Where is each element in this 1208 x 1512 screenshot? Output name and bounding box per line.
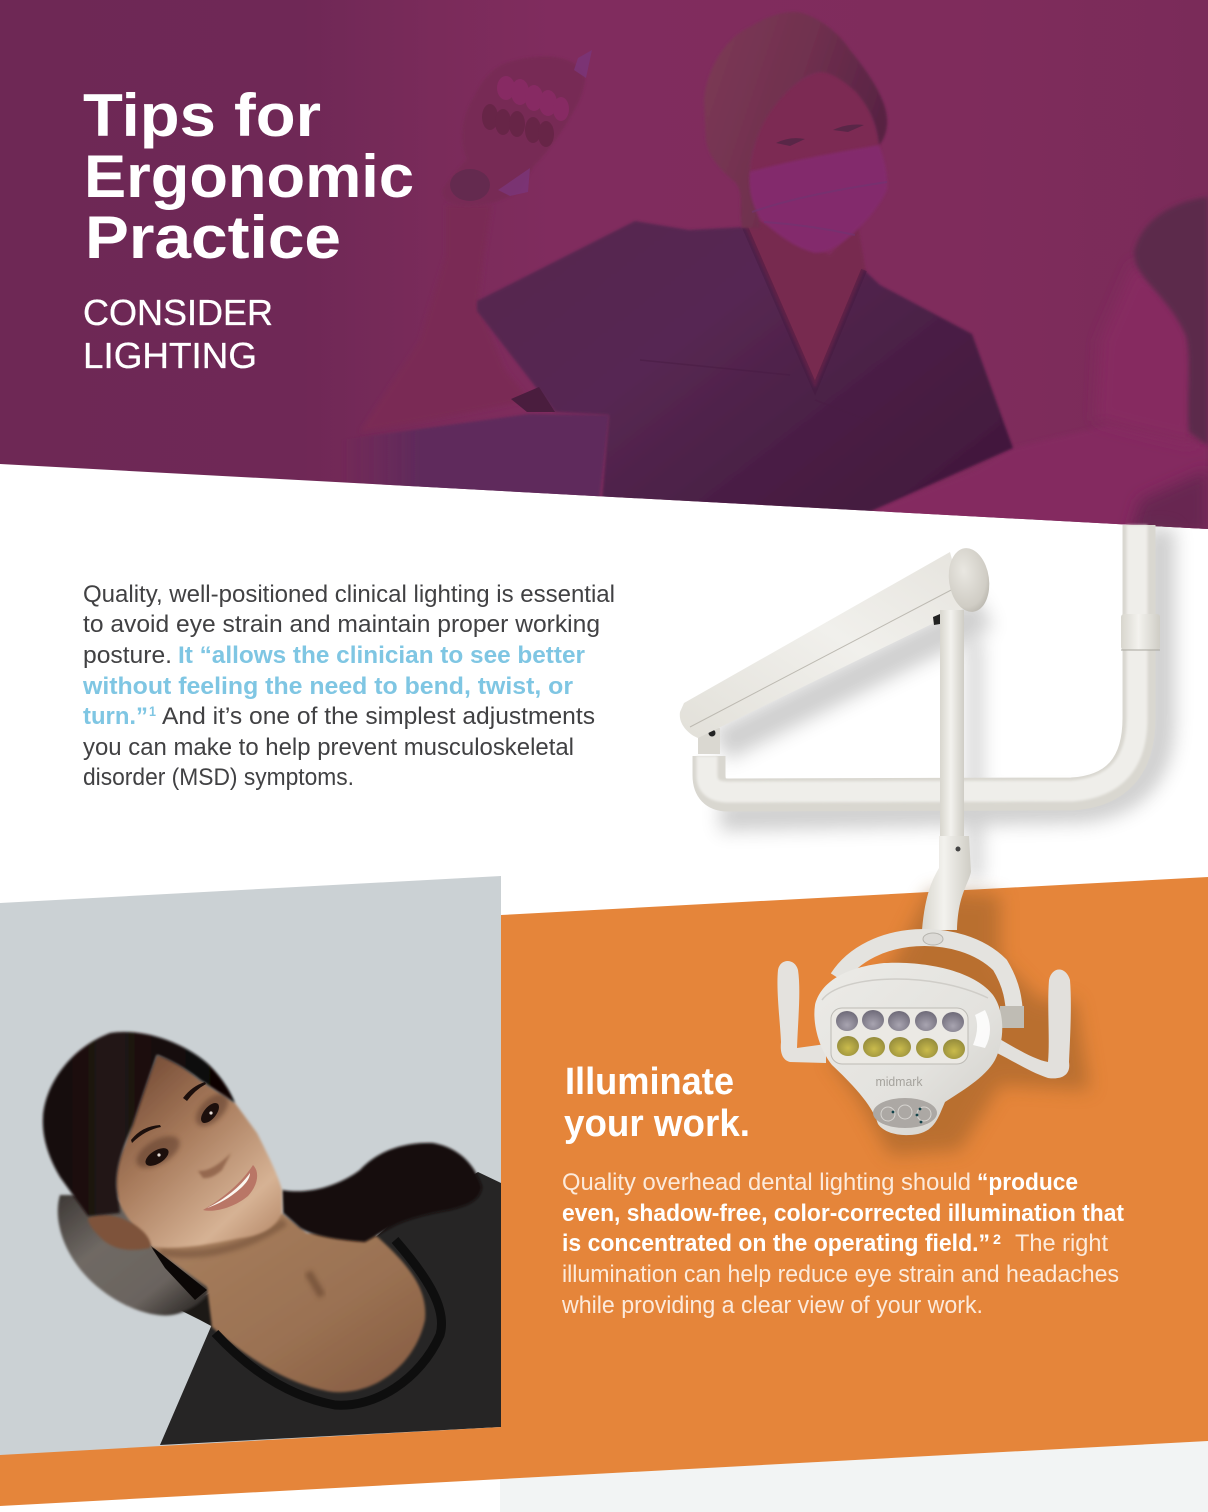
patient hair	[1134, 197, 1208, 445]
title: Practice	[85, 204, 341, 271]
yoke arc	[838, 937, 1015, 1020]
lighting paragraph: even, shadow-free, color-corrected illumination that	[562, 1200, 1124, 1227]
lighting paragraph: “produce	[977, 1169, 1078, 1196]
ear	[88, 1215, 151, 1250]
intro paragraph: disorder (MSD) symptoms.	[83, 764, 354, 791]
patient shoulder	[870, 432, 1207, 529]
control panel	[873, 1098, 937, 1128]
title: Tips for	[83, 82, 321, 149]
lighting paragraph: The right	[1015, 1230, 1108, 1257]
heading: Illuminate your work: Illuminate	[565, 1061, 734, 1103]
surgical mask	[749, 145, 887, 253]
nose shadow	[198, 1153, 231, 1178]
dental light in hand	[496, 58, 584, 198]
smile	[203, 1165, 257, 1211]
intro paragraph: without feeling the need to bend, twist, or	[82, 673, 573, 700]
intro paragraph: 1	[149, 703, 156, 719]
intro paragraph: you can make to help prevent musculoskeletal	[83, 734, 574, 761]
header panel with tinted clinician photo	[0, 0, 1208, 535]
eyes and brows	[131, 1082, 222, 1169]
clinician hair	[704, 12, 887, 228]
orange surface shadow	[830, 890, 1090, 1155]
intro paragraph: posture.	[83, 642, 172, 669]
subtitle: CONSIDER	[83, 292, 273, 333]
lighting paragraph: is concentrated on the operating field.”	[562, 1230, 990, 1257]
lighting paragraph: illumination can help reduce eye strain and headaches	[562, 1261, 1119, 1288]
lighting paragraph	[561, 1169, 1124, 1319]
heading: Illuminate your work	[564, 1061, 750, 1145]
title: Ergonomic	[84, 143, 414, 210]
lens panel	[831, 1008, 968, 1064]
vertical stem	[940, 610, 964, 840]
shirt collar	[215, 1240, 442, 1405]
ponytail	[282, 1143, 482, 1242]
pivot post	[698, 728, 720, 754]
eye socket shadows	[135, 1093, 230, 1170]
yellow lens row	[837, 1036, 965, 1059]
neck and chest	[152, 1213, 425, 1392]
headrest post	[182, 1294, 214, 1326]
subtitle	[83, 292, 273, 376]
page background: lower right tint	[500, 1441, 1208, 1512]
right handle	[995, 970, 1071, 1078]
diagonal arm	[680, 552, 965, 738]
clinician face	[752, 73, 877, 169]
intro paragraph: And it’s one of the simplest adjustments	[162, 703, 595, 730]
intro paragraph: It “allows the clinician to see better	[178, 642, 585, 669]
faint raised sleeve	[360, 205, 540, 430]
clinician scrubs	[477, 221, 1013, 512]
small dark underarm shadow	[511, 387, 555, 412]
panel: photo of reclined patient	[0, 870, 501, 1460]
intro paragraph: Quality, well-positioned clinical lighting is essential	[83, 581, 615, 608]
stem joint and elbow	[922, 836, 971, 930]
hair	[43, 1032, 235, 1216]
arm shadows	[720, 528, 1160, 880]
subtitle: LIGHTING	[83, 335, 257, 376]
collar on ceiling pipe	[1121, 614, 1160, 650]
hair under jaw	[150, 1245, 207, 1300]
lamp head body	[814, 963, 1002, 1135]
lighting paragraph: 2	[993, 1231, 1001, 1247]
headrest	[58, 1195, 212, 1315]
shirt	[160, 1172, 501, 1445]
lighting paragraph: Quality overhead dental lighting should	[562, 1169, 971, 1196]
vertical ceiling pipe with curve and horizontal arm	[709, 525, 1139, 795]
intro paragraph	[82, 581, 615, 791]
purple lens row	[836, 1010, 964, 1032]
intro paragraph: turn.”	[83, 703, 148, 730]
intro paragraph: to avoid eye strain and maintain proper working	[83, 611, 600, 638]
illustration: ceiling-mounted dental light	[680, 525, 1160, 1155]
clinician neck and chest	[749, 222, 865, 380]
panel: orange band	[0, 877, 1208, 1506]
title	[83, 82, 414, 271]
heading: Illuminate your work: your work.	[564, 1103, 750, 1145]
face	[115, 1055, 282, 1248]
lighting paragraph: while providing a clear view of your work.	[561, 1292, 983, 1319]
left handle	[777, 961, 826, 1063]
brand mark: midmark	[876, 1074, 923, 1089]
arm end cap	[945, 546, 993, 614]
patient face	[1102, 274, 1189, 438]
tray in foreground	[356, 413, 608, 496]
